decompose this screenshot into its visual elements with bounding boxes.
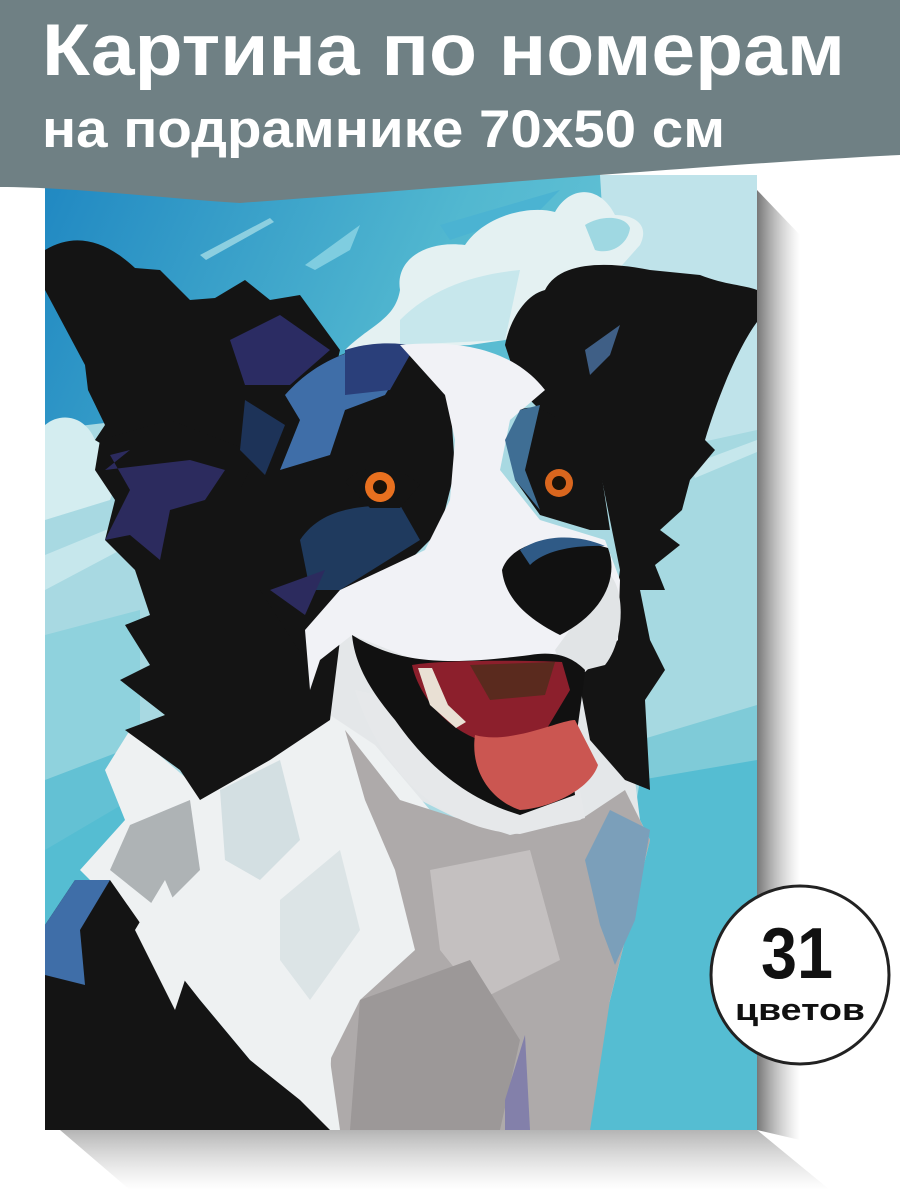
canvas shadow [60,190,830,1190]
head black [240,344,455,660]
right eye [545,469,573,497]
teeth [418,668,466,728]
badge: 31 colours: 31 [761,914,833,994]
painting: sky background [45,175,757,1130]
right ear highlight [585,325,620,375]
right ear and neck side [505,265,757,790]
head blue highlights [280,345,415,470]
badge: 31 colours [711,886,889,1064]
inner mouth [412,661,570,740]
mouth lip line white [355,690,585,834]
badge: 31 colours: цветов [735,992,865,1027]
left eye [345,467,420,508]
dog [45,240,757,1130]
white blaze and muzzle [305,343,620,690]
black body bottom left [45,880,330,1130]
chest fur light [80,715,650,1130]
neck and muzzle underlay [305,590,640,850]
purple-blue ear fur [105,450,225,560]
header banner [0,0,900,203]
muzzle right [555,575,621,675]
subtitle: на подрамнике 70х50 см [42,100,725,159]
clouds [45,192,643,520]
back fur left of head [95,420,340,800]
tongue [474,720,598,810]
nose [502,540,611,635]
left ear [45,240,340,520]
white fur spikes [135,880,335,1080]
mouth [352,635,585,815]
title: Картина по номерам [42,10,845,91]
right eye patch black [515,408,610,530]
blue fur shadow right [585,810,650,965]
chest fur grey [330,730,650,1130]
